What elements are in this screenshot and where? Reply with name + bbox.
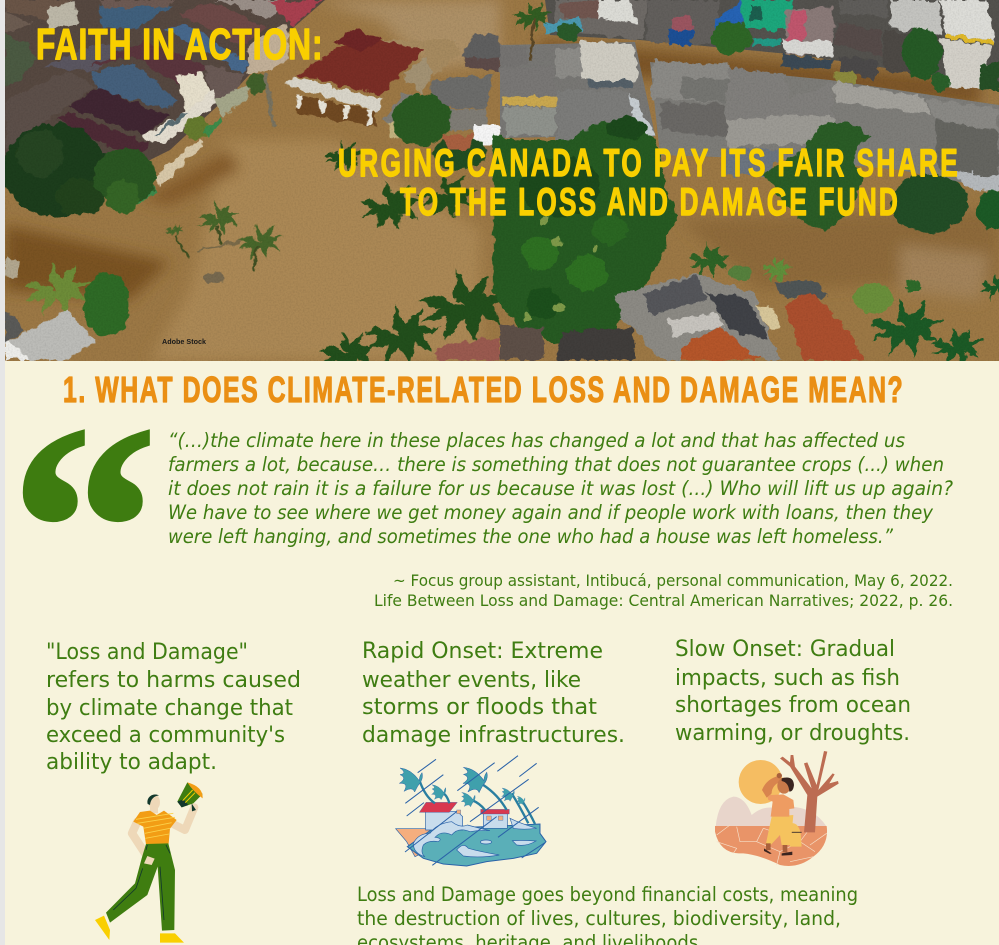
text block: Loss and Damage definition	[46, 639, 301, 775]
icon: child in a drought landscape	[715, 751, 839, 866]
quote attribution: ~ Focus group assistant, Intibucá, personal communication, May 6, 2022.	[393, 571, 953, 590]
quote attribution: Life Between Loss and Damage: Central American Narratives; 2022, p. 26.	[374, 591, 953, 610]
text block: Slow Onset: warming, or droughts.	[675, 720, 910, 746]
closing text block	[357, 883, 858, 945]
text block: Rapid Onset: weather events, like	[362, 667, 581, 693]
photo: aerial view of a flooded neighbourhood	[3, 0, 999, 375]
quote text: farmers a lot, because… there is something that does not guarantee crops (...) when	[168, 453, 944, 476]
text block: Loss and Damage definition: refers to harms caused	[46, 667, 301, 693]
icon: person with a megaphone	[95, 782, 203, 943]
quote attribution	[374, 571, 953, 610]
text block: Slow Onset: Slow Onset: Gradual	[675, 636, 895, 662]
text block: Slow Onset: shortages from ocean	[675, 692, 911, 718]
photo credit: Adobe Stock	[162, 337, 207, 346]
text block: Rapid Onset	[362, 638, 625, 748]
icon: large quotation mark: “	[10, 365, 158, 693]
text block: Rapid Onset: storms or floods that	[362, 694, 597, 720]
subtitle: TO THE LOSS AND DAMAGE FUND	[400, 181, 898, 224]
right-half buildings and trees	[493, 0, 999, 367]
closing text block: the destruction of lives, cultures, biodiversity, land,	[357, 907, 841, 930]
building underlay: left, top right and middle rows	[5, 0, 325, 165]
left page edge	[0, 0, 5, 945]
quote text	[168, 429, 953, 548]
quote text: it does not rain it is a failure for us because it was lost (...) Who will lift us up again?	[168, 477, 953, 500]
text block: Slow Onset: impacts, such as fish	[675, 665, 900, 691]
icon: storm and flood over houses	[396, 756, 546, 866]
text block: Loss and Damage definition: ability to adapt.	[46, 749, 217, 775]
title: Faith in Action: FAITH IN ACTION:	[36, 20, 323, 69]
quote text: “(…)the climate here in these places has changed a lot and that has affected us	[168, 429, 905, 452]
text block: Rapid Onset: Rapid Onset: Extreme	[362, 638, 603, 664]
quote text: were left hanging, and sometimes the one who had a house was left homeless.”	[168, 525, 894, 548]
text block: Rapid Onset: damage infrastructures.	[362, 722, 625, 748]
subtitle	[338, 142, 958, 224]
text block: Slow Onset	[675, 636, 911, 746]
closing text block: Loss and Damage goes beyond financial costs, meaning	[357, 883, 858, 906]
text block: Loss and Damage definition: by climate change that	[46, 695, 293, 721]
quote text: We have to see where we get money again and if people work with loans, then they	[168, 501, 933, 524]
photo grain texture	[5, 0, 999, 361]
subtitle: URGING CANADA TO PAY ITS FAIR SHARE	[338, 142, 958, 185]
left-half buildings and trees	[3, 0, 512, 375]
text block: Loss and Damage definition: "Loss and Damage"	[46, 639, 248, 665]
text block: Loss and Damage definition: exceed a community's	[46, 722, 285, 748]
section heading: 1. WHAT DOES CLIMATE-RELATED LOSS AND DAMAGE MEAN?	[63, 369, 903, 410]
